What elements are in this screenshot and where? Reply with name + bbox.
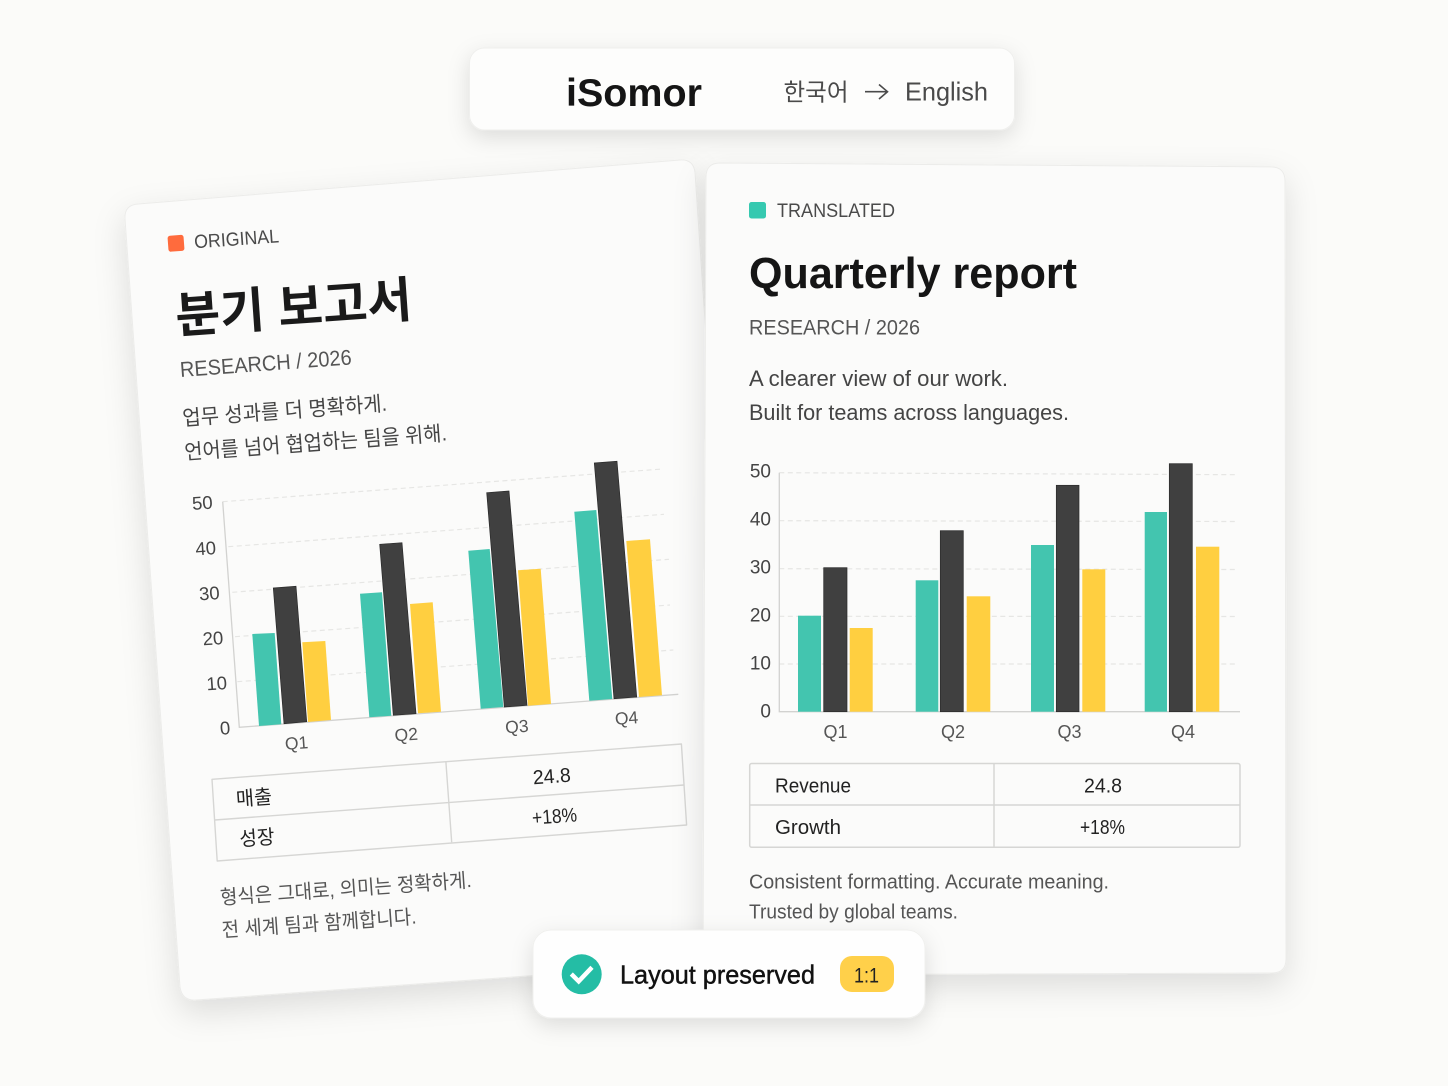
subtitle: research: RESEARCH / 2026 [179, 345, 352, 382]
bar chart: translated: 40 [750, 510, 771, 530]
footer text: English: Consistent formatting. Accurate meaning. [749, 870, 1109, 894]
table: translated: Growth [775, 817, 841, 839]
bar chart: translated: Q4 [1171, 722, 1195, 742]
bar chart: original: 30 [198, 582, 220, 604]
bar chart: original: 0 [219, 717, 231, 739]
panel: original Korean card [125, 160, 747, 1000]
body text: English: Built for teams across languages. [749, 400, 1069, 425]
bar chart: original: Q2 [394, 724, 419, 745]
table: original: 매출 [235, 785, 273, 811]
bar chart: translated: 0 [760, 702, 771, 722]
table: original: +18% [531, 804, 578, 830]
label: original: ORIGINAL [193, 226, 280, 253]
footer text: English: Trusted by global teams. [749, 900, 958, 924]
bar chart: translated: Q1 [823, 722, 848, 742]
table: translated: Revenue [775, 776, 851, 798]
language: Korean: 한국어 [784, 80, 848, 106]
bar chart: translated: 20 [750, 606, 771, 626]
bar chart: translated [750, 462, 1240, 742]
title: English: Quarterly report [749, 249, 1077, 298]
bar chart: original: Q1 [284, 732, 309, 754]
footer text: Korean [219, 869, 472, 942]
bar chart: original: 10 [206, 672, 228, 694]
icon: check circle [562, 954, 602, 994]
bar chart: translated: Q2 [941, 722, 965, 742]
title: Korean: 분기 보고서 [174, 274, 414, 344]
bar chart: original: 40 [195, 537, 217, 559]
panel: translated English card [703, 163, 1286, 975]
table: original: 성장 [239, 825, 275, 851]
body text: Korean [182, 393, 448, 464]
arrow [865, 84, 888, 99]
language: English: English [905, 76, 988, 106]
bar chart: translated: Q3 [1057, 722, 1082, 742]
body text: Korean: 업무 성과를 더 명확하게. [182, 393, 388, 430]
table: translated: +18% [1080, 816, 1125, 839]
marker: original [167, 235, 185, 252]
body text: Korean: 언어를 넘어 협업하는 팀을 위해. [184, 422, 448, 464]
table: translated: 24.8 [1084, 776, 1122, 798]
label: translated: TRANSLATED [777, 201, 895, 222]
brand name: iSomor [566, 72, 702, 115]
footer text: English [749, 870, 1109, 924]
bar chart: translated: 30 [750, 558, 771, 578]
table: translated [750, 764, 1240, 847]
badge: layout preserved [533, 930, 925, 1018]
bar chart: original: 20 [202, 627, 224, 649]
marker: translated [749, 202, 766, 218]
ratio chip [840, 956, 894, 992]
table: original: 24.8 [532, 765, 572, 789]
bar chart: translated: 10 [750, 654, 771, 674]
table: original [212, 744, 687, 861]
ratio chip: 1:1 [854, 964, 879, 988]
bar chart: original: Q3 [504, 716, 529, 737]
header bar [470, 48, 1014, 130]
bar chart: original: Q4 [614, 707, 639, 729]
subtitle: research: RESEARCH / 2026 [749, 316, 920, 340]
bar chart: translated: 50 [750, 462, 771, 482]
footer text: Korean: 형식은 그대로, 의미는 정확하게. [219, 869, 472, 909]
badge label: Layout preserved [620, 960, 815, 990]
body text: English: A clearer view of our work. [749, 366, 1008, 391]
bar chart: original [191, 461, 678, 754]
footer text: Korean: 전 세계 팀과 함께합니다. [221, 905, 417, 942]
bar chart: original: 50 [191, 492, 213, 514]
body text: English [749, 366, 1069, 425]
